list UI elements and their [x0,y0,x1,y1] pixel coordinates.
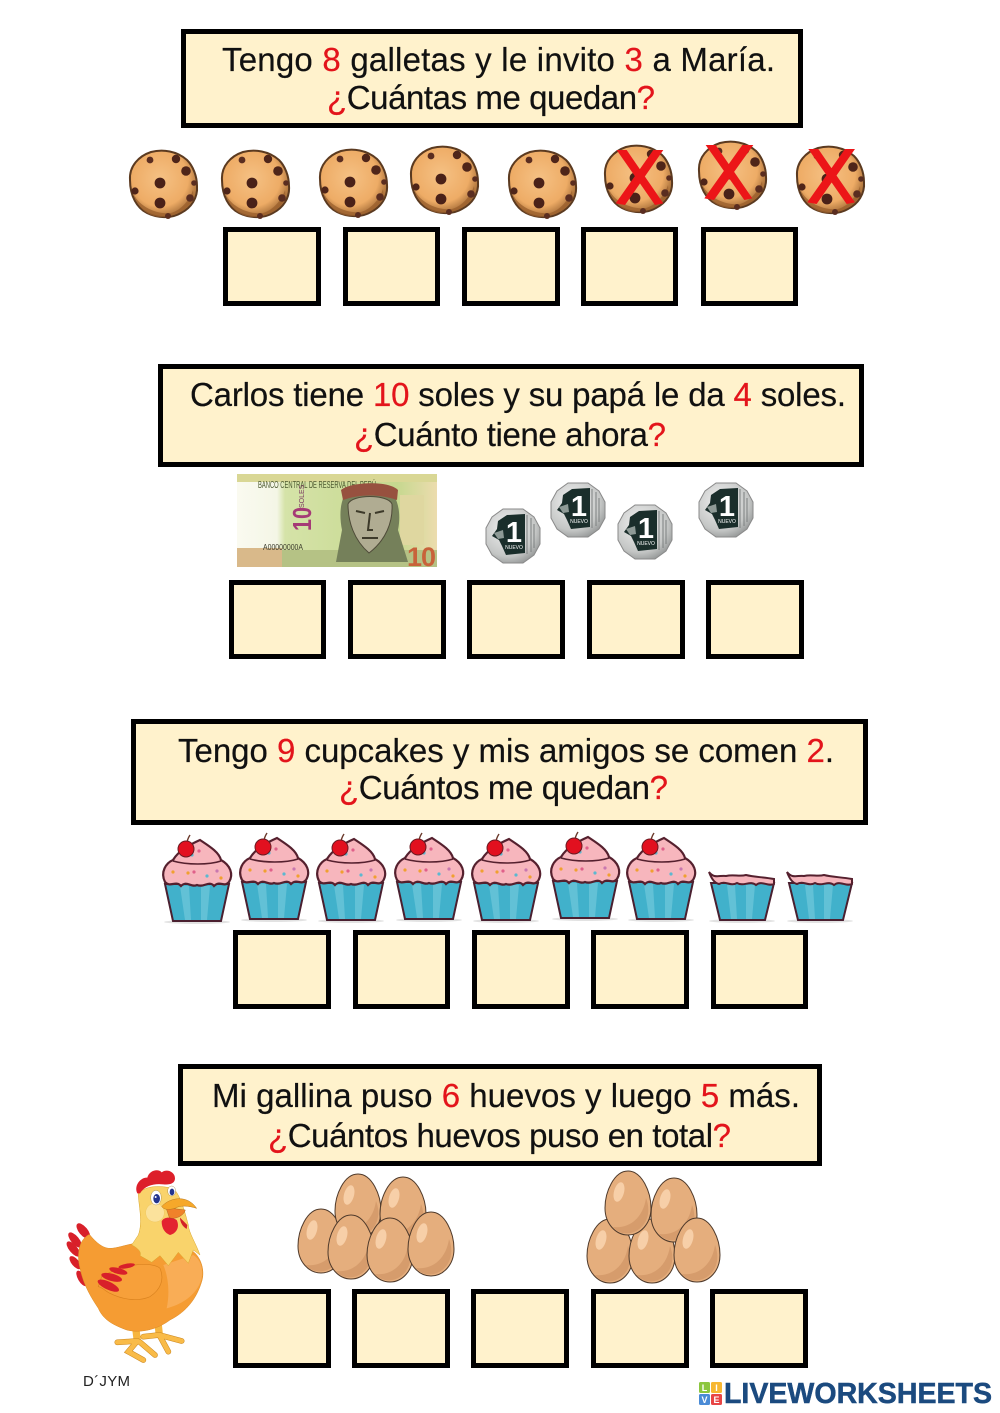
icon: four one-sol coins: NUEVO [505,545,523,551]
text: problem 3 question: ¿Cuántos me quedan? [339,769,668,806]
icon row: seven whole cupcakes and two eaten [163,832,853,924]
icon: group of six eggs [298,1174,454,1282]
text: problem 2 question: ¿Cuánto tiene ahora? [354,416,666,453]
icon: four one-sol coins: 1 [638,513,654,545]
panel: problem 3 heading [134,722,866,822]
icon: four one-sol coins: 1 [506,517,522,549]
icon: live squares: L [702,1383,708,1393]
icon: live squares [699,1382,722,1405]
icon: live squares: I [715,1383,718,1393]
text: problem 4 question: ¿Cuántos huevos puso en total? [268,1117,731,1154]
label: author initials: D´JYM [83,1373,130,1390]
answer boxes: problem 4 [236,1292,806,1366]
answer boxes: problem 1 [226,230,796,304]
icon: ten soles banknote: 10 [407,542,436,572]
logo: liveworksheets [699,1378,992,1410]
text: problem 2 statement: Carlos tiene 10 soles y su papá le da 4 soles. [190,376,846,413]
answer boxes: problem 3 [236,932,806,1006]
icon: live squares: V [701,1395,708,1405]
icon: four one-sol coins: NUEVO [570,519,588,525]
icon: four one-sol coins [486,483,753,563]
text: problem 4 statement: Mi gallina puso 6 huevos y luego 5 más. [212,1077,800,1114]
icon: four one-sol coins: NUEVO [637,541,655,547]
panel: problem 1 heading [184,32,800,126]
text: liveworksheets wordmark: LIVEWORKSHEETS [724,1378,992,1410]
icon: live squares: E [713,1395,720,1405]
panel: problem 2 heading [160,366,862,464]
icon: ten soles banknote: SOLES [299,484,306,508]
icon: ten soles banknote [237,474,437,572]
icon: ten soles banknote: 10 [287,507,317,531]
icon: four one-sol coins: 1 [571,491,587,523]
icon: red crosses on three cookies [616,145,855,205]
text: problem 3 statement: Tengo 9 cupcakes y mis amigos se comen 2. [178,732,834,769]
icon: four one-sol coins: 1 [719,491,735,523]
icon: ten soles banknote: BANCO CENTRAL DE RESERVA DEL PERÚ [258,478,376,491]
text: problem 1 question: ¿Cuántas me quedan? [327,79,655,116]
icon: ten soles banknote: A00000000A [263,543,304,552]
answer boxes: problem 2 [232,582,802,656]
icon: hen [64,1170,203,1360]
panel: problem 4 heading [180,1066,820,1164]
text: problem 1 statement: Tengo 8 galletas y le invito 3 a María. [222,41,775,78]
icon: group of five eggs [587,1171,720,1283]
icon: four one-sol coins: NUEVO [718,519,736,525]
icon row: eight cookies [130,142,864,219]
